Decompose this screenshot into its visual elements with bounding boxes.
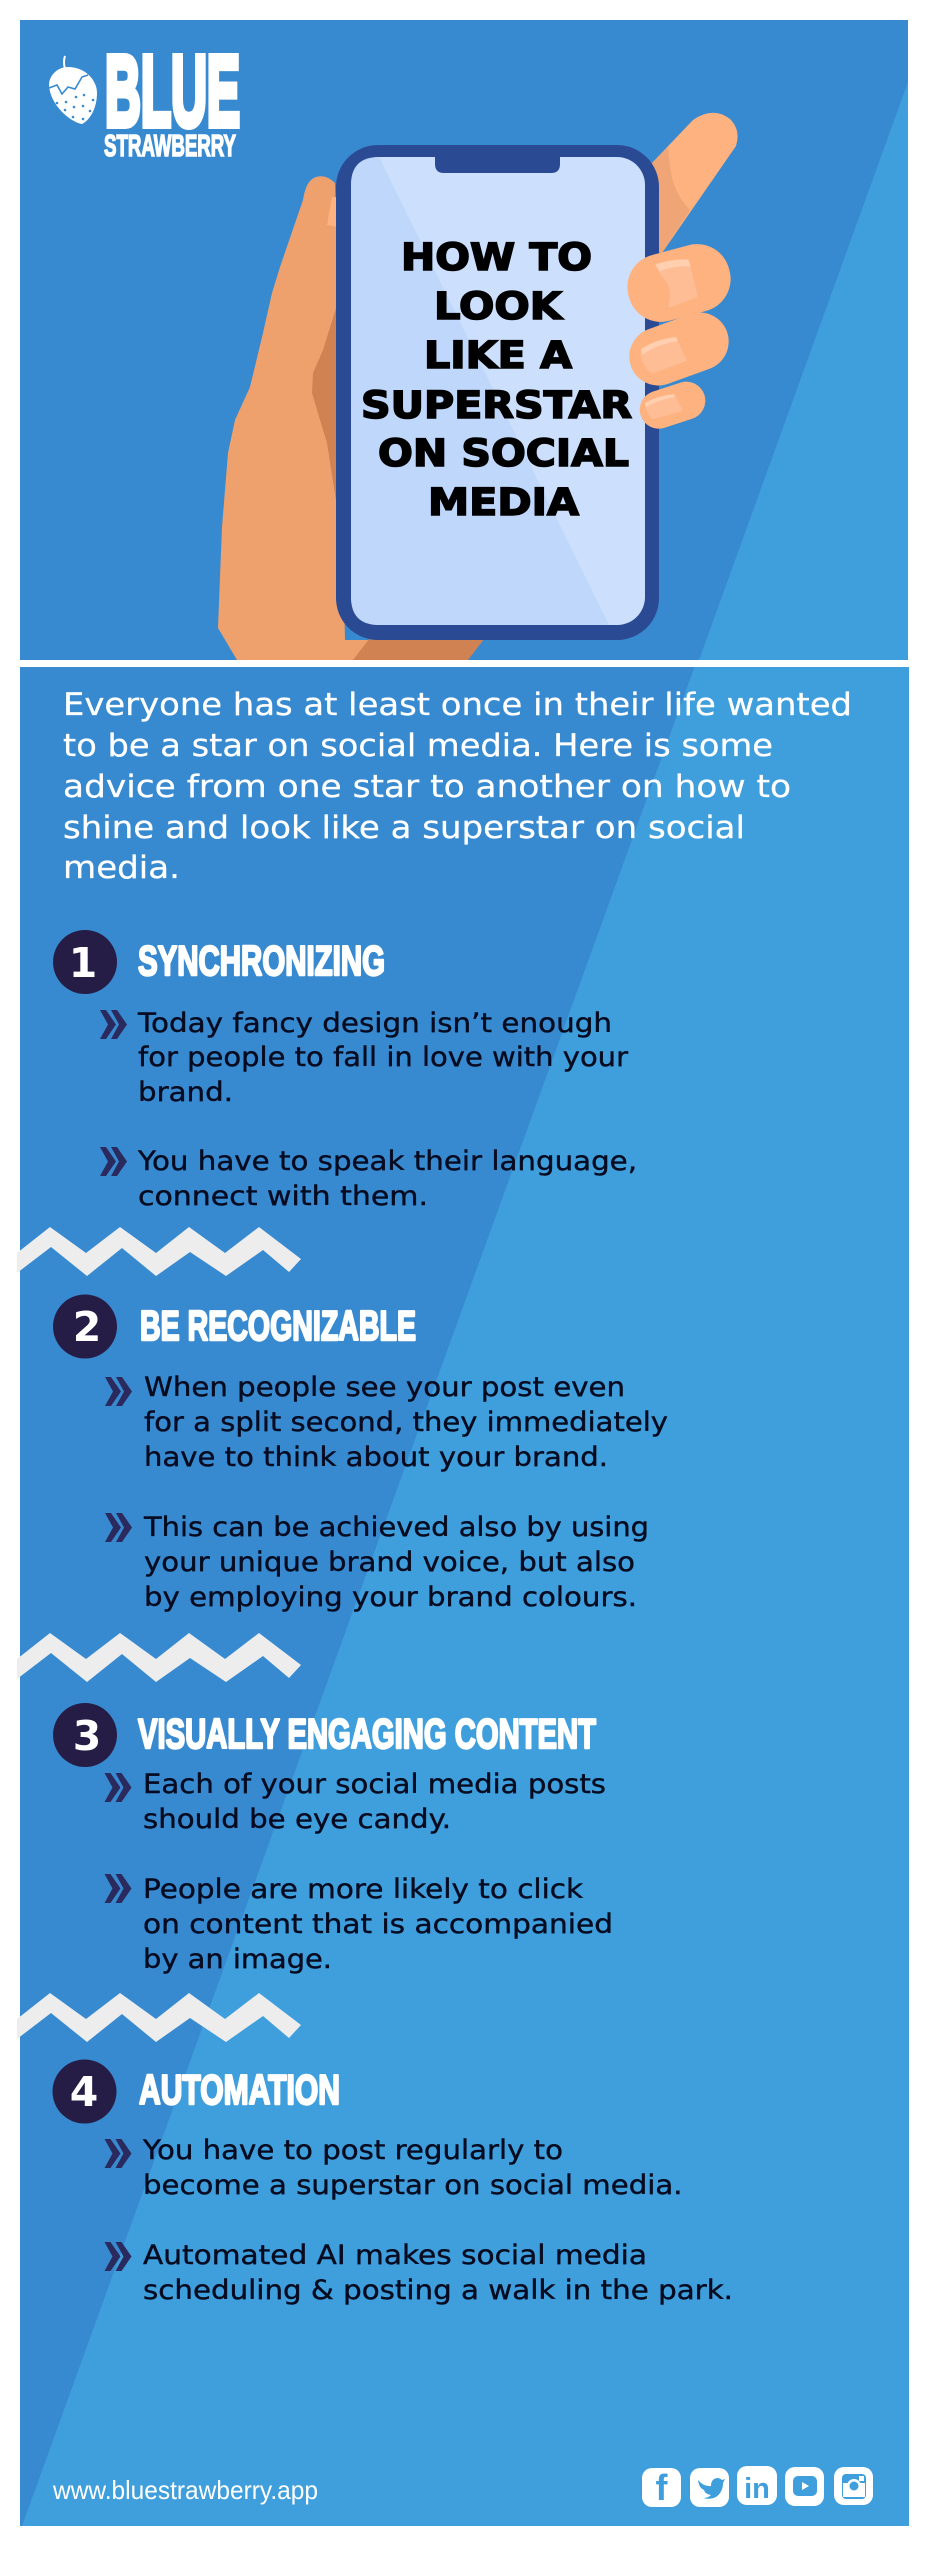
screen shade	[351, 157, 609, 625]
wrist shadow	[353, 639, 484, 660]
illustration: hand holding phone	[218, 113, 738, 670]
bullet text	[143, 1512, 649, 1613]
bullet text: become a superstar on social media.	[143, 2170, 682, 2201]
title: HOW TO	[401, 236, 592, 279]
section 3: visually engaging content	[53, 1703, 613, 1975]
icon: facebook: f	[656, 2467, 668, 2508]
bullet text: scheduling & posting a walk in the park.	[143, 2275, 733, 2306]
heading 2: BE RECOGNIZABLE	[140, 1302, 416, 1349]
bullet text: brand.	[138, 1077, 233, 1108]
bullet text: People are more likely to click	[143, 1874, 584, 1905]
logo word: STRAWBERRY: STRAWBERRY	[104, 128, 236, 163]
bullet icon	[104, 2139, 132, 2168]
bullet text	[143, 1874, 613, 1975]
number badge 2: 2	[73, 1303, 101, 1351]
phone notch	[435, 157, 560, 173]
bullet text: Each of your social media posts	[143, 1769, 606, 1800]
heading 3: VISUALLY ENGAGING CONTENT	[138, 1710, 596, 1757]
number badge 4	[52, 2060, 116, 2124]
bullet text: connect with them.	[138, 1181, 428, 1212]
bullet text: Automated AI makes social media	[143, 2240, 647, 2271]
bullet text: on content that is accompanied	[143, 1909, 613, 1940]
intro text: shine and look like a superstar on social	[63, 810, 745, 846]
number badge 1: 1	[69, 939, 97, 987]
finger 3	[640, 382, 706, 429]
thumb	[650, 113, 738, 253]
bullet text: This can be achieved also by using	[143, 1512, 649, 1543]
hand shadow	[312, 308, 336, 500]
icon: strawberry	[49, 56, 97, 124]
bullet text: your unique brand voice, but also	[144, 1547, 635, 1578]
bullet text: You have to speak their language,	[137, 1146, 637, 1177]
social icons	[642, 2466, 873, 2508]
section 4: automation	[52, 2060, 733, 2306]
panel: content background	[20, 660, 910, 2526]
bullet icon	[105, 1513, 132, 1542]
bullet text: When people see your post even	[144, 1372, 625, 1403]
title: ON SOCIAL	[378, 432, 629, 475]
zigzag divider 3	[17, 1993, 301, 2042]
icon: linkedin	[737, 2466, 777, 2505]
highlight on finger	[327, 197, 336, 226]
bullet text	[137, 1008, 628, 1108]
intro text	[63, 687, 852, 886]
icon: instagram	[834, 2467, 873, 2505]
intro text: Everyone has at least once in their life wanted	[63, 687, 852, 723]
bullet text	[143, 2240, 733, 2306]
bullet text	[144, 1372, 668, 1473]
title: LOOK	[434, 285, 563, 328]
finger 2	[629, 312, 729, 386]
title: MEDIA	[428, 481, 579, 524]
bullet icon	[104, 1773, 132, 1802]
bullet text: by employing your brand colours.	[144, 1582, 637, 1613]
bullet text: should be eye candy.	[143, 1804, 451, 1835]
number badge 4: 4	[70, 2068, 98, 2116]
panel: hero	[20, 20, 908, 670]
zigzag divider 1	[17, 1227, 301, 1276]
hand palm	[218, 176, 370, 670]
bullet text: have to think about your brand.	[144, 1442, 608, 1473]
bullet icon	[105, 1377, 132, 1406]
title: SUPERSTAR	[361, 384, 632, 427]
icon: facebook	[642, 2467, 681, 2508]
bullet icon	[104, 1874, 132, 1903]
number badge 3	[53, 1703, 117, 1767]
number badge 1	[53, 930, 117, 994]
bullet text: You have to post regularly to	[142, 2135, 563, 2166]
bullet text: by an image.	[143, 1944, 332, 1975]
intro text: media.	[63, 850, 180, 886]
phone screen	[351, 157, 645, 625]
bullet text: Today fancy design isn’t enough	[137, 1008, 612, 1039]
section 2: be recognizable	[53, 1294, 668, 1613]
zigzag divider 2	[17, 1633, 301, 1682]
bullet text	[143, 1769, 606, 1835]
panel: hero: BLUE	[105, 36, 240, 148]
number badge 2	[53, 1294, 117, 1358]
finger 1	[627, 244, 731, 322]
icon: linkedin: in	[744, 2473, 770, 2505]
title	[361, 236, 632, 524]
icon: youtube	[785, 2467, 824, 2506]
bullet icon	[104, 2242, 132, 2271]
number badge 3: 3	[73, 1712, 101, 1760]
bullet text: for a split second, they immediately	[144, 1407, 668, 1438]
intro text: to be a star on social media. Here is some	[63, 728, 773, 764]
bullet icon	[100, 1010, 127, 1039]
bullet text	[142, 2135, 683, 2201]
bullet text	[137, 1146, 637, 1212]
heading 1: SYNCHRONIZING	[138, 937, 385, 984]
bullet text: for people to fall in love with your	[138, 1042, 628, 1073]
heading 4: AUTOMATION	[139, 2066, 340, 2113]
intro text: advice from one star to another on how to	[63, 769, 791, 805]
icon: twitter	[690, 2468, 729, 2507]
phone body	[336, 145, 659, 640]
footer website: www.bluestrawberry.app	[52, 2475, 318, 2505]
logo: Blue Strawberry	[49, 53, 240, 157]
title: LIKE A	[424, 334, 572, 377]
fingers	[627, 244, 731, 429]
section 1: synchronizing	[53, 930, 637, 1212]
bullet icon	[100, 1147, 127, 1176]
